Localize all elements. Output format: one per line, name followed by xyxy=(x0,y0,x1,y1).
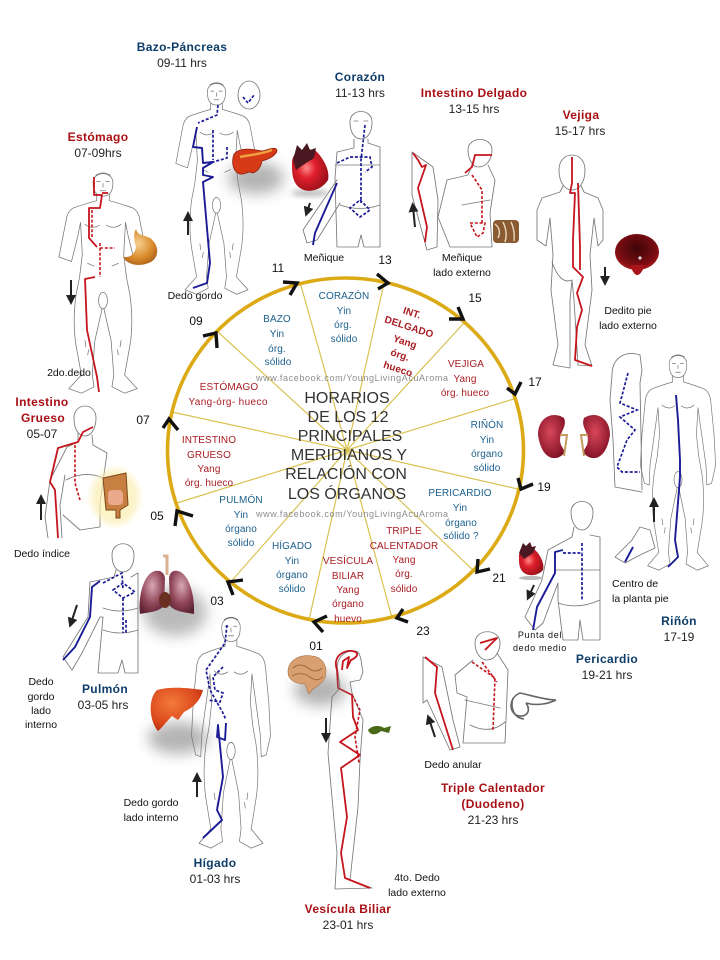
organ: heart xyxy=(519,542,543,580)
note: Dedo gordo xyxy=(168,290,223,302)
hour numbers: 09 xyxy=(189,314,203,328)
heading: Pulmón xyxy=(82,682,128,696)
organ: small intestine xyxy=(493,220,519,243)
foot xyxy=(615,527,655,563)
hours: 01-03 hrs xyxy=(190,872,240,886)
heading: Bazo-Páncreas xyxy=(137,40,227,54)
hour numbers: 05 xyxy=(150,509,164,523)
arrow up xyxy=(196,777,198,797)
sector: vejiga: VEJIGA xyxy=(448,359,484,370)
heading: Pericardio xyxy=(576,652,638,666)
arrow up xyxy=(187,216,189,235)
heading line 2: Grueso xyxy=(21,411,65,425)
hours: 17-19 xyxy=(664,630,695,644)
arrow up xyxy=(653,502,655,522)
sector: estómago: Yang-órg- hueco xyxy=(188,397,268,408)
sector: pulmón: órgano xyxy=(225,524,257,535)
sector: bazo: Yin xyxy=(270,329,284,340)
sector: pericardio xyxy=(428,488,492,542)
body figure xyxy=(537,155,603,368)
heading: Intestino Delgado xyxy=(421,86,527,100)
note line 2: dedo medio xyxy=(513,643,567,653)
note: Dedo anular xyxy=(424,759,482,771)
note: 2do.dedo xyxy=(47,367,91,379)
body figure xyxy=(423,632,508,750)
watermark bottom: www.facebook.com/YoungLivingAcuAroma xyxy=(255,509,448,519)
sector: riñón: órgano xyxy=(471,449,503,460)
panel: Hígado xyxy=(124,617,270,886)
body figure xyxy=(412,140,495,250)
sector: hígado: HÍGADO xyxy=(272,539,312,552)
sector: intestino delgado: Yang xyxy=(392,334,418,352)
sector: intestino grueso: GRUESO xyxy=(187,450,231,461)
sector: intestino delgado: DELGADO xyxy=(383,315,435,341)
note line 3: lado xyxy=(31,705,51,717)
heading: Riñón xyxy=(661,614,697,628)
arrow xyxy=(307,203,310,212)
hours: 09-11 hrs xyxy=(157,56,207,70)
body figure xyxy=(525,502,600,640)
sector: corazón xyxy=(319,289,369,345)
note: Centro de xyxy=(612,578,658,590)
panel: Corazón xyxy=(291,70,385,264)
note: Dedo índice xyxy=(14,548,70,560)
organ: brain xyxy=(288,656,346,706)
arrow xyxy=(529,585,534,596)
hour numbers: 15 xyxy=(468,291,482,305)
hours: 05-07 xyxy=(27,427,58,441)
sector: bazo xyxy=(263,314,292,368)
wheel spokes xyxy=(172,282,522,620)
note line 2: lado externo xyxy=(599,320,657,332)
sector: estómago: ESTÓMAGO xyxy=(200,380,258,393)
note line 2: la planta pie xyxy=(612,593,669,605)
sector: bazo: sólido xyxy=(265,357,292,368)
heading: Vesícula Biliar xyxy=(305,902,391,916)
sector: hígado: Yin xyxy=(285,556,299,567)
sector: vesícula biliar: Yang xyxy=(336,585,360,596)
sector: triple calentador: TRIPLE xyxy=(386,526,422,537)
sector: intestino delgado: órg. xyxy=(389,347,411,364)
hour numbers xyxy=(136,253,551,653)
wheel title: LOS ÓRGANOS xyxy=(288,484,406,503)
sector: pulmón xyxy=(219,493,263,549)
organ: kidneys xyxy=(538,415,610,458)
note line 2: lado externo xyxy=(433,267,491,279)
body figure xyxy=(192,617,270,848)
arrow xyxy=(71,605,77,623)
heading: Hígado xyxy=(194,856,236,870)
wheel ring xyxy=(168,278,524,623)
heading: Estómago xyxy=(68,130,128,144)
organ: gallbladder xyxy=(368,726,391,734)
body figure xyxy=(176,83,257,294)
panel: Triple Calentador xyxy=(423,632,556,827)
side figure xyxy=(610,354,642,492)
hours: 11-13 hrs xyxy=(335,86,385,100)
organ: heart xyxy=(291,143,329,196)
sector: triple calentador: CALENTADOR xyxy=(370,541,438,552)
arrow up xyxy=(40,499,42,520)
sector: vejiga xyxy=(441,359,489,399)
note line 2: lado interno xyxy=(124,812,179,824)
organ: large intestine xyxy=(91,469,139,525)
note line 2: gordo xyxy=(28,691,55,703)
sector: hígado xyxy=(272,539,312,595)
sector: pericardio: órgano xyxy=(445,518,477,529)
sector: triple calentador: órg. xyxy=(395,569,413,580)
note line 2: lado externo xyxy=(388,887,446,899)
heading: Vejiga xyxy=(563,108,599,122)
wheel title: RELACIÓN CON xyxy=(285,464,407,483)
wheel title: DE LOS 12 xyxy=(308,409,389,426)
sector: vejiga: órg. hueco xyxy=(441,388,489,399)
panel: Intestino Delgado xyxy=(412,86,527,279)
heading: Corazón xyxy=(335,70,385,84)
sector: corazón: órg. xyxy=(334,320,352,331)
sector: intestino delgado: hueco xyxy=(382,360,414,379)
sector: riñón: sólido xyxy=(474,463,501,474)
sector: pericardio: Yin xyxy=(453,503,467,514)
sector: vesícula biliar: VESÍCULA xyxy=(323,554,373,567)
sector: intestino grueso xyxy=(182,435,236,489)
heading: Intestino xyxy=(15,395,69,409)
sector: hígado: órgano xyxy=(276,570,308,581)
sector: pericardio: sólido ? xyxy=(443,531,479,542)
organ: pancreas gray xyxy=(511,693,556,719)
panel: Pericardio xyxy=(513,502,638,682)
sector: vesícula biliar: órgano xyxy=(332,599,364,610)
body figure xyxy=(63,544,138,673)
sector: vesícula biliar: BILIAR xyxy=(332,571,364,582)
panel: Vejiga xyxy=(537,108,659,368)
body figure xyxy=(59,173,147,393)
panel: Pulmón xyxy=(25,544,207,731)
arrow down xyxy=(604,267,606,281)
organ: bladder xyxy=(615,234,659,275)
body figure xyxy=(328,651,372,889)
hours: 23-01 hrs xyxy=(323,918,373,932)
hour numbers: 19 xyxy=(537,480,551,494)
sector: pericardio: PERICARDIO xyxy=(428,488,492,499)
sector: intestino delgado: INT. xyxy=(401,306,422,322)
hour numbers: 23 xyxy=(416,624,430,638)
note: Punta del xyxy=(518,630,562,640)
body figure xyxy=(303,112,380,247)
arrow down xyxy=(70,280,72,300)
heading: Triple Calentador xyxy=(441,781,545,795)
sector: intestino grueso: INTESTINO xyxy=(182,435,236,446)
sector: riñón: Yin xyxy=(480,435,494,446)
hours: 19-21 hrs xyxy=(582,668,632,682)
ring chevrons xyxy=(163,274,533,632)
sector: corazón: sólido xyxy=(331,334,358,345)
sector: corazón: Yin xyxy=(337,306,351,317)
organ: liver xyxy=(148,688,208,754)
hour numbers: 21 xyxy=(492,571,506,585)
sector: pulmón: sólido xyxy=(228,538,255,549)
inset head xyxy=(238,81,260,109)
panel: Estómago xyxy=(47,130,157,393)
hour numbers: 17 xyxy=(528,375,542,389)
hours: 07-09hrs xyxy=(74,146,122,160)
sector: vesícula biliar xyxy=(323,554,373,625)
sector: vejiga: Yang xyxy=(453,374,477,385)
front figure xyxy=(640,355,716,570)
sector: bazo: BAZO xyxy=(263,314,291,325)
note: 4to. Dedo xyxy=(394,872,440,884)
hour numbers: 07 xyxy=(136,413,150,427)
arrow up xyxy=(429,719,435,737)
hours: 15-17 hrs xyxy=(555,124,605,138)
note: Dedo xyxy=(28,676,54,688)
hours: 03-05 hrs xyxy=(78,698,128,712)
sector: pulmón: Yin xyxy=(234,510,248,521)
sector: intestino grueso: Yang xyxy=(197,464,221,475)
panel: Bazo-Páncreas xyxy=(137,40,284,302)
hour numbers: 13 xyxy=(378,253,392,267)
sector: hígado: sólido xyxy=(279,584,306,595)
sector: bazo: órg. xyxy=(268,344,286,355)
hours: 13-15 hrs xyxy=(449,102,499,116)
hour numbers: 03 xyxy=(210,594,224,608)
note: Dedito pie xyxy=(604,305,652,317)
sector: riñón: RIÑÓN xyxy=(471,418,503,431)
wheel title xyxy=(285,390,407,503)
organ: stomach xyxy=(123,229,157,265)
wheel title: MERIDIANOS Y xyxy=(291,447,407,464)
panel: Intestino Grueso xyxy=(14,395,139,560)
note: Dedo gordo xyxy=(124,797,179,809)
hour numbers: 11 xyxy=(272,261,285,275)
sector: riñón xyxy=(471,418,503,474)
note line 4: interno xyxy=(25,719,57,731)
sector: vesícula biliar: huevo xyxy=(334,614,362,625)
organ: lungs xyxy=(140,556,207,636)
sector: triple calentador xyxy=(370,526,438,595)
panel: Vesícula Biliar xyxy=(288,651,446,932)
wheel: meridian clock xyxy=(136,253,551,653)
sector: corazón: CORAZÓN xyxy=(319,289,369,302)
organ: pancreas xyxy=(228,148,284,194)
arrow down xyxy=(325,718,327,738)
wheel title: HORARIOS xyxy=(304,390,390,407)
note: Meñique xyxy=(304,252,344,264)
hour numbers: 01 xyxy=(309,639,323,653)
sector: triple calentador: sólido xyxy=(391,584,418,595)
note: Meñique xyxy=(442,252,482,264)
heading line 2: (Duodeno) xyxy=(461,797,525,811)
sector: intestino grueso: órg. hueco xyxy=(185,478,233,489)
watermark top: www.facebook.com/YoungLivingAcuAroma xyxy=(255,373,448,383)
wheel title: PRINCIPALES xyxy=(298,428,402,445)
body figure xyxy=(45,406,107,538)
hours: 21-23 hrs xyxy=(468,813,518,827)
sector: pulmón: PULMÓN xyxy=(219,493,263,506)
arrow up xyxy=(413,207,415,227)
sector: triple calentador: Yang xyxy=(392,555,416,566)
sector: estómago xyxy=(188,380,268,408)
sector: intestino delgado xyxy=(382,306,435,379)
panel: Riñón xyxy=(538,354,716,644)
